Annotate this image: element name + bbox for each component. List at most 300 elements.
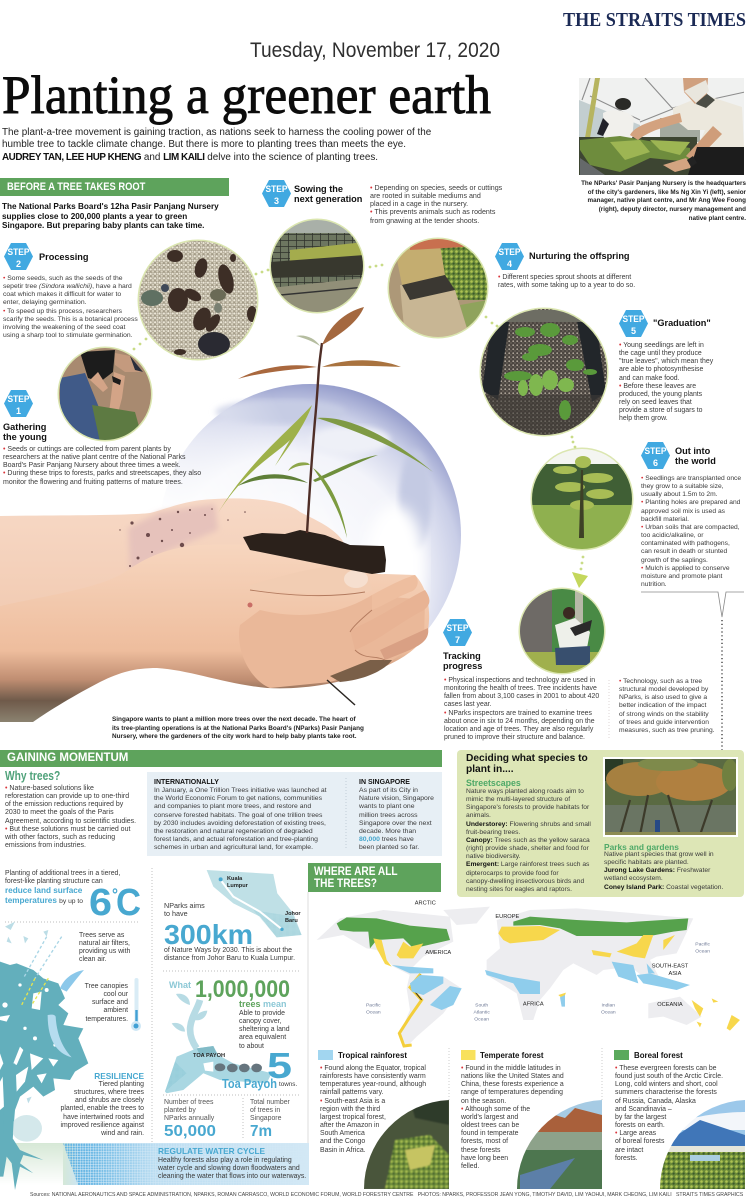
forest map: Ocean	[474, 1017, 489, 1023]
step badge 1: STEP	[8, 394, 30, 404]
step 5 text: "true leaves", which mean they	[619, 358, 713, 365]
boreal text: of boreal forests	[615, 1138, 664, 1145]
resilience text: wind and rain.	[101, 1130, 144, 1137]
step 5 text: rely on seed leaves that	[619, 399, 692, 406]
section bar: before a tree takes root	[0, 178, 229, 196]
step 6 text: moisture and promote plant	[641, 573, 722, 580]
boreal text: • Large areas	[615, 1130, 656, 1137]
temperate text: these forests	[461, 1147, 500, 1154]
step 7 text: • NParks inspectors are trained to examine trees	[444, 710, 592, 717]
reduce land surface highlight: reduce land surface	[5, 886, 82, 895]
forest map: Pacific	[695, 941, 710, 947]
step 2 text: sepetir tree (Sindora wallichii), have a hard	[3, 283, 132, 290]
heading: where are all the trees: THE TREES?	[314, 878, 377, 890]
6 degrees stat: °	[112, 885, 118, 904]
land surface temperature text	[5, 870, 120, 885]
6 degrees stat	[89, 882, 141, 924]
five towns stat: 5	[267, 1045, 292, 1086]
photo circle: step 1 gathering	[57, 346, 153, 442]
temperate text: have long been	[461, 1155, 508, 1162]
boreal text: Long, cold winters and short, cool	[615, 1081, 718, 1088]
step 6 text: • Planting holes are prepared and	[641, 499, 740, 506]
forest map: ASIA	[669, 971, 682, 977]
intro text	[2, 127, 431, 163]
boreal heading: Boreal forest	[634, 1050, 683, 1060]
forest map: ARCTIC	[415, 900, 436, 906]
nursery lead paragraph: supplies close to 200,000 plants a year to green	[2, 212, 187, 221]
resilience text: Tiered planting	[99, 1081, 144, 1088]
resilience text: have intertwined roots and	[63, 1114, 144, 1121]
air filter text: natural air filters,	[79, 940, 130, 947]
air filter text: clean air.	[79, 956, 107, 963]
header photo: nursery gardeners	[579, 78, 745, 175]
step badge 2: STEP	[8, 247, 30, 257]
thermometer	[131, 978, 141, 1031]
step 3 text: from gnawing at the tender shoots.	[370, 217, 479, 225]
step 6 text: too acidic/alkaline, or	[641, 532, 703, 539]
step 7 text: about once in six to 24 months, depending on the	[444, 718, 595, 725]
total trees text	[250, 1098, 290, 1122]
heading: where are all the trees	[314, 866, 398, 890]
temperate text: found in temperate	[461, 1130, 518, 1137]
step badge 5: STEP	[622, 314, 644, 324]
canopy cooling text: cool our	[103, 991, 128, 998]
step 5 text: • Before these leaves are	[619, 383, 696, 390]
step 4 text	[498, 274, 635, 289]
photo circle: step 6 sapling in park	[530, 448, 634, 551]
boreal text: forests.	[615, 1155, 638, 1162]
step 6 text: • Mulch is applied to conserve	[641, 565, 730, 572]
trees mean label: trees mean	[239, 999, 287, 1009]
tropical text: temperatures year-round, although	[320, 1081, 426, 1088]
Johor Baru label: Baru	[285, 918, 298, 924]
canopy cover text: to about	[239, 1043, 264, 1050]
step 6 text: • Seedlings are transplanted once	[641, 475, 741, 482]
parks and gardens text: Native plant species that grow well in	[604, 851, 714, 858]
step 7 text: pruned to improve their structure and balance.	[444, 734, 585, 741]
step badge 7: STEP	[446, 623, 468, 633]
Kuala Lumpur label	[227, 876, 248, 889]
internationally text: INTERNATIONALLY	[154, 779, 219, 786]
in Singapore text	[359, 779, 434, 851]
why trees text	[5, 784, 136, 849]
NParks aims text: NParks aims	[164, 901, 205, 910]
photo: tropical rainforest canopy	[360, 1098, 450, 1190]
technology note: better indication of the impact	[619, 702, 706, 709]
step badge 6: STEP	[644, 446, 666, 456]
internationally text: the World Economic Forum to get nations, communities	[154, 795, 322, 802]
soil clump	[243, 530, 386, 574]
Toa Payoh map label: TOA PAYOH	[193, 1053, 225, 1059]
NParks aims text: to have	[164, 909, 188, 918]
streetscapes text: canopy-dwelling insectivorous birds and	[466, 878, 584, 885]
step badge 3	[262, 180, 291, 207]
step 6 heading: the world	[675, 456, 716, 466]
step 2 text: scarify the seeds. This is a botanical process	[3, 316, 138, 323]
step badge 2: 2	[16, 259, 21, 269]
forest map: Ocean	[695, 948, 710, 954]
parks and gardens text: wetland ecosystem.	[604, 875, 663, 882]
technology note: structural model developed by	[619, 686, 708, 693]
forest map: AFRICA	[523, 1002, 544, 1008]
tropical text: • South-east Asia is a	[320, 1098, 385, 1105]
pointer line and dotted leader to technology note	[609, 592, 744, 750]
boreal text: forests on earth.	[615, 1122, 665, 1129]
resilience text: structures, where trees	[74, 1089, 144, 1096]
Nature Ways text	[164, 946, 295, 962]
internationally text: schemes in urban and agricultural land, for example.	[154, 844, 313, 851]
technology note: of strong winds on the stability	[619, 711, 709, 718]
step 3 heading: Sowing the	[294, 184, 343, 194]
hero caption: Singapore wants to plant a million more trees over the next decade. The heart of	[112, 716, 356, 723]
temperate text: nations like the United States and	[461, 1073, 564, 1080]
step 5 text	[619, 342, 714, 422]
internationally text: by 2030 includes avoiding deforestation of existing trees,	[154, 820, 326, 827]
forest map: AMERICA	[425, 950, 451, 956]
streetscapes text: fruit-bearing trees.	[466, 829, 520, 836]
streetscapes text: Understorey: Flowering shrubs and small	[466, 821, 591, 828]
streetscapes text: animals.	[466, 812, 491, 819]
in Singapore text: As part of its City in	[359, 787, 418, 794]
internationally text: the restoration and natural regeneration of degraded	[154, 828, 313, 835]
step 2 text: involving the weakening of the seed coat	[3, 324, 125, 331]
temperate text: on the season.	[461, 1098, 506, 1105]
7m stat: 7m	[250, 1123, 272, 1140]
step 5 text: and can make food.	[619, 375, 680, 382]
step badge 4	[495, 243, 524, 270]
step badge 4: STEP	[498, 247, 520, 257]
step 5 text: the cage until they produce	[619, 350, 702, 357]
sources line: Sources: NATIONAL AERONAUTICS AND SPACE ADMINISTRATION, NPARKS, ROMAN CARRASCO, WORLD ECONOMIC FORUM, WORLD FORESTRY CENTRE PHOTOS: NPARKS, PROFESSOR JEAN YONG, TIMOTHY DAVID, LIM YAOHUI, MARK CHEONG, LIM KAILI STRAITS TIMES GRAPHICS	[30, 1192, 743, 1198]
forest map: Atlantic	[473, 1010, 490, 1016]
step 7 heading	[443, 651, 482, 671]
resilience text: improved resilience against	[60, 1122, 144, 1129]
parks and gardens text	[604, 851, 723, 891]
air filter text	[79, 932, 130, 963]
tropical text: largest tropical forest,	[320, 1114, 386, 1121]
Nature Ways text: distance from Johor Baru to Kuala Lumpur.	[164, 955, 295, 962]
300km stat: 300km	[164, 919, 253, 950]
forest map: OCEANIA	[657, 1002, 683, 1008]
intro text: humble tree to tackle climate change. But there is more to planting trees than meets the eye.	[2, 139, 406, 150]
step 6 text: • Urban soils that are compacted,	[641, 524, 740, 531]
internationally text: and companies to plant more trees, and restore and	[154, 803, 311, 810]
step 1 text: Board's Pasir Panjang Nursery about three times a week.	[3, 462, 181, 469]
step 6 heading	[675, 446, 716, 466]
tropical text: region with the third	[320, 1106, 380, 1113]
step 7 text: monitoring the health of trees. Tree incidents have	[444, 685, 597, 692]
step 1 text: researchers at the native plant centre of the National Parks	[3, 454, 186, 461]
what label: What	[169, 980, 191, 990]
resilience text	[60, 1080, 144, 1137]
internationally text: In January, a One Trillion Trees initiative was launched at	[154, 787, 327, 794]
in Singapore text: IN SINGAPORE	[359, 779, 410, 786]
header photo caption: native plant centre.	[689, 215, 746, 222]
Nature Ways text: of Nature Ways by 2030. This is about the	[164, 947, 292, 954]
photo: temperate forest lake	[515, 1098, 605, 1190]
resilience heading: RESILIENCE	[94, 1071, 144, 1081]
step 2 text: coat which makes it difficult for water to	[3, 291, 121, 298]
photo: yellow saraca street trees	[603, 757, 738, 837]
canopy cooling text: temperatures.	[85, 1016, 128, 1023]
streetscapes text: (right) provide shade, shelter and food for	[466, 845, 589, 852]
in Singapore text: Nature vision, Singapore	[359, 795, 434, 802]
streetscapes text: mimic the multi-layered structure of	[466, 796, 570, 803]
canopy cooling text: Tree canopies	[85, 983, 128, 990]
step 7 text	[444, 676, 599, 741]
parks and gardens heading: Parks and gardens	[604, 842, 679, 852]
parks and gardens text: Jurong Lake Gardens: Freshwater	[604, 867, 710, 874]
step 6 text: approved soil mix is used as	[641, 508, 725, 515]
arrow to step 7	[572, 572, 588, 588]
Singapore island and sprout illustration	[165, 994, 272, 1093]
hero caption: its tree-planting operations is at the National Parks Board's (NParks) Pasir Panjang	[112, 725, 364, 732]
step 3 text: placed in a cage in the nursery.	[370, 200, 468, 208]
land surface temperature text: forest-like planting structure can	[5, 878, 103, 885]
header photo caption: manager, native plant centre, and Mr Ang Wee Foong	[588, 197, 746, 204]
step 4 heading: Nurturing the offspring	[529, 251, 630, 261]
step badge 6	[641, 442, 670, 469]
step 1 text: • Seeds or cuttings are collected from parent plants by	[3, 446, 171, 453]
Kuala Lumpur label: Kuala	[227, 876, 242, 882]
step 5 text: • Young seedlings are left in	[619, 342, 704, 349]
photo circle: step 2 seeds	[138, 240, 258, 360]
step badge 3: STEP	[266, 184, 288, 194]
canopy cover text: sheltering a land	[239, 1026, 290, 1033]
step 4 text: rates, with some taking up to a year to do so.	[498, 282, 635, 289]
photo: boreal forest mountains	[660, 1100, 745, 1189]
streetscapes text: Nature ways planted along roads aim to	[466, 788, 584, 795]
why trees text: emissions from industries.	[5, 842, 86, 849]
step 2 heading: Processing	[39, 252, 89, 262]
streetscapes text: nesting sites for eagles and raptors.	[466, 886, 572, 893]
forest map	[317, 900, 740, 1047]
step badge 6: 6	[653, 458, 658, 468]
total trees text: Singapore	[250, 1115, 281, 1122]
why trees text: reforestation can provide up to one-third	[5, 793, 129, 800]
internationally text: forest lands, and actual reforestation and tree-planting	[154, 836, 318, 843]
temperate text: range of temperatures depending	[461, 1089, 563, 1096]
air filter text: Trees serve as	[79, 932, 124, 939]
streetscapes text: dipterocarps to provide food for	[466, 870, 559, 877]
Johor Baru label: Johor	[285, 911, 301, 917]
tropical text: and the Congo	[320, 1138, 365, 1145]
air filter text: providing us with	[79, 948, 130, 955]
in Singapore text: been planted so far.	[359, 844, 419, 851]
boreal text: and Scandinavia –	[615, 1106, 672, 1113]
step 6 text	[641, 475, 741, 588]
why trees text: • But these solutions must be carried out	[5, 826, 130, 833]
legend column dividers	[449, 1048, 602, 1100]
step 7 text: fallen from about 3,100 cases in 2001 to about 420	[444, 693, 599, 700]
legend swatch: boreal	[614, 1050, 629, 1060]
trees planted annually text: planted by	[164, 1107, 196, 1114]
nursery lead paragraph	[2, 202, 219, 230]
boreal text: • These evergreen forests can be	[615, 1065, 717, 1072]
in Singapore text: decade. More than	[359, 828, 416, 835]
species heading: Deciding what species to	[466, 753, 588, 764]
step 3 text: • This prevents animals such as rodents	[370, 208, 495, 216]
intro text: The plant-a-tree movement is gaining traction, as nations seek to harness the cooling power of the	[2, 127, 431, 138]
header photo caption: of the city's gardeners, like Ms Ng Xin Yi (left), senior	[588, 189, 746, 196]
step 6 text: can result in death or stunted	[641, 548, 727, 555]
technology note: of trees and guide intervention	[619, 719, 709, 726]
boreal text: of Russia, Canada, Alaska	[615, 1098, 696, 1105]
resilience text: and shrubs are closely	[75, 1097, 144, 1104]
canopy cooling text: surface and	[92, 999, 128, 1006]
technology note: measures, such as tree pruning.	[619, 727, 715, 734]
regulate water cycle text	[158, 1156, 306, 1180]
why trees text: with other factors, such as reducing	[5, 834, 115, 841]
hero caption: Nursery, where the gardeners of the city work hard to help baby plants take root.	[112, 733, 357, 740]
boreal text: summers characterise the forests	[615, 1089, 717, 1096]
rule at right of left column	[307, 892, 309, 1182]
trees planted annually text: Number of trees	[164, 1099, 213, 1106]
step 6 text: they grow to a suitable size,	[641, 483, 724, 490]
step 3 text: are rooted in suitable mediums and	[370, 192, 481, 200]
streetscapes heading: Streetscapes	[466, 778, 521, 788]
total trees text: of trees in	[250, 1107, 280, 1114]
ground and water band	[0, 1143, 309, 1185]
section bar: gaining momentum	[0, 750, 442, 767]
Johor Baru label	[285, 911, 301, 924]
reduce land surface highlight: temperatures by up to	[5, 896, 83, 905]
step 6 text: usually about 1.5m to 2m.	[641, 491, 718, 498]
canopy cover text	[239, 1010, 290, 1050]
why trees text: • Nature-based solutions like	[5, 785, 94, 792]
step 1 text: monitor the flowering and fruiting patterns of mature trees.	[3, 479, 183, 486]
forest map: Ocean	[366, 1009, 381, 1015]
step 6 heading: Out into	[675, 446, 710, 456]
step 5 text: produced, the young plants	[619, 391, 702, 398]
intro text: AUDREY TAN, LEE HUP KHENG and LIM KAILI delve into the science of planting trees.	[2, 152, 378, 163]
step 5 heading: "Graduation"	[653, 318, 711, 328]
boreal text: are intact	[615, 1147, 643, 1154]
step 5 text: help them grow.	[619, 415, 668, 422]
temperate text: felled.	[461, 1163, 479, 1170]
panel: internationally and in Singapore	[147, 772, 442, 856]
technology note: NParks, is also used to give a	[619, 694, 707, 701]
NParks aims text	[164, 901, 205, 918]
step badge 7	[443, 619, 472, 646]
streetscapes text: Emergent: Large rainforest trees such as	[466, 861, 589, 868]
step 7 text: cases last year.	[444, 701, 492, 708]
step 6 text: nutrition.	[641, 581, 667, 588]
temperate text: • Found in the middle latitudes in	[461, 1065, 561, 1072]
header photo caption: (right), deputy director, nursery management and	[599, 206, 746, 213]
step badge 5	[619, 310, 648, 337]
step 3 heading: next generation	[294, 194, 362, 204]
internationally text: conserve forested habitats. The goal of one trillion trees	[154, 812, 322, 819]
regulate water cycle text: Healthy forests also play a role in regulating	[158, 1157, 292, 1164]
6 degrees stat: 6	[89, 882, 112, 924]
step badge 2	[4, 243, 33, 270]
regulate water cycle heading: REGULATE WATER CYCLE	[158, 1146, 265, 1156]
in Singapore text: Singapore over the next	[359, 820, 432, 827]
technology note: • Technology, such as a tree	[619, 678, 702, 685]
step badge 3: 3	[274, 196, 279, 206]
section bar: where are all the trees	[308, 863, 441, 892]
step 7 heading: progress	[443, 661, 482, 671]
parks and gardens text: Coney Island Park: Coastal vegetation.	[604, 884, 723, 891]
trees planted annually text: NParks annually	[164, 1115, 214, 1122]
legend swatch: tropical	[318, 1050, 333, 1060]
globe	[172, 384, 461, 629]
boreal text: by far the largest	[615, 1114, 666, 1121]
towns label: towns.	[279, 1081, 297, 1088]
technology note	[619, 678, 715, 734]
step badge 7: 7	[455, 635, 460, 645]
temperate text: • Although some of the	[461, 1106, 530, 1113]
temperate text: forests, most of	[461, 1138, 508, 1145]
step 7 text: location and age of trees. They are also regularly	[444, 726, 593, 733]
step 1 heading	[3, 422, 47, 442]
forest map: Pacific	[366, 1002, 381, 1008]
plant seedling	[218, 307, 433, 538]
header photo caption	[581, 180, 746, 222]
step 2 text: • To speed up this process, researchers	[3, 308, 122, 315]
step 2 text: enter, delaying germination.	[3, 299, 87, 306]
nursery lead paragraph: Singapore. But preparing baby plants can take time.	[2, 221, 204, 230]
temperate text	[461, 1064, 564, 1170]
regulate water cycle text: cleaning the water that flows into our waterways.	[158, 1173, 306, 1180]
step 3 text	[370, 184, 502, 225]
step 3 text: • Depending on species, seeds or cuttings	[370, 184, 502, 192]
tropical text: Basin in Africa.	[320, 1147, 366, 1154]
hero caption	[112, 716, 364, 740]
nursery lead paragraph: The National Parks Board's 12ha Pasir Panjang Nursery	[2, 202, 219, 211]
step 6 text: contaminated with pathogens,	[641, 540, 730, 547]
step 2 text	[3, 275, 138, 339]
tropical text	[320, 1064, 426, 1154]
step 1 heading: the young	[3, 432, 47, 442]
why trees text: 2030 to meet the goals of the Paris	[5, 809, 114, 816]
why trees text: of the emission reductions required by	[5, 801, 123, 808]
map of Kuala Lumpur to Johor Baru	[207, 870, 302, 937]
reduce land surface highlight	[5, 886, 83, 905]
forest map: Indian	[602, 1002, 615, 1008]
boreal text	[615, 1064, 723, 1162]
Toa Payoh label: Toa Payoh	[222, 1076, 277, 1091]
temperate text: world's largest and	[461, 1114, 518, 1121]
photo circle: step 5 seedlings	[480, 308, 608, 437]
heading: where are all the trees: WHERE ARE ALL	[314, 866, 398, 878]
one million stat: 1,000,000	[195, 976, 290, 1003]
temperate text: oldest trees can be	[461, 1122, 519, 1129]
Kuala Lumpur label: Lumpur	[227, 883, 248, 889]
step badge 4: 4	[507, 259, 512, 269]
legend swatch: temperate	[461, 1050, 476, 1060]
in Singapore text: wants to plant one	[359, 803, 415, 810]
step 6 text: growth of the saplings.	[641, 557, 708, 564]
canopy cooling text	[84, 982, 128, 1023]
trees planted annually text	[164, 1098, 214, 1122]
step 2 text: • Some seeds, such as the seeds of the	[3, 275, 123, 282]
heading: why trees: Why trees?	[5, 769, 60, 783]
internationally text	[154, 779, 327, 851]
step 4 text: • Different species sprout shoots at different	[498, 274, 631, 281]
6 degrees stat: C	[116, 882, 141, 924]
tropical heading: Tropical rainforest	[338, 1050, 407, 1060]
step 5 text: provide a store of sugars to	[619, 407, 702, 414]
heading: before a tree takes root: BEFORE A TREE TAKES ROOT	[7, 181, 145, 193]
step 1 text: • During these trips to forests, parks and streetscapes, they also	[3, 470, 201, 477]
resilience text: planted, enable the trees to	[60, 1105, 144, 1112]
header photo caption: The NParks' Pasir Panjang Nursery is the headquarters	[581, 180, 746, 187]
tropical text: rainforests have consistently warm	[320, 1073, 426, 1080]
step badge 1: 1	[16, 406, 21, 416]
streetscapes text: Singapore's forests to provide habitats for	[466, 804, 589, 811]
